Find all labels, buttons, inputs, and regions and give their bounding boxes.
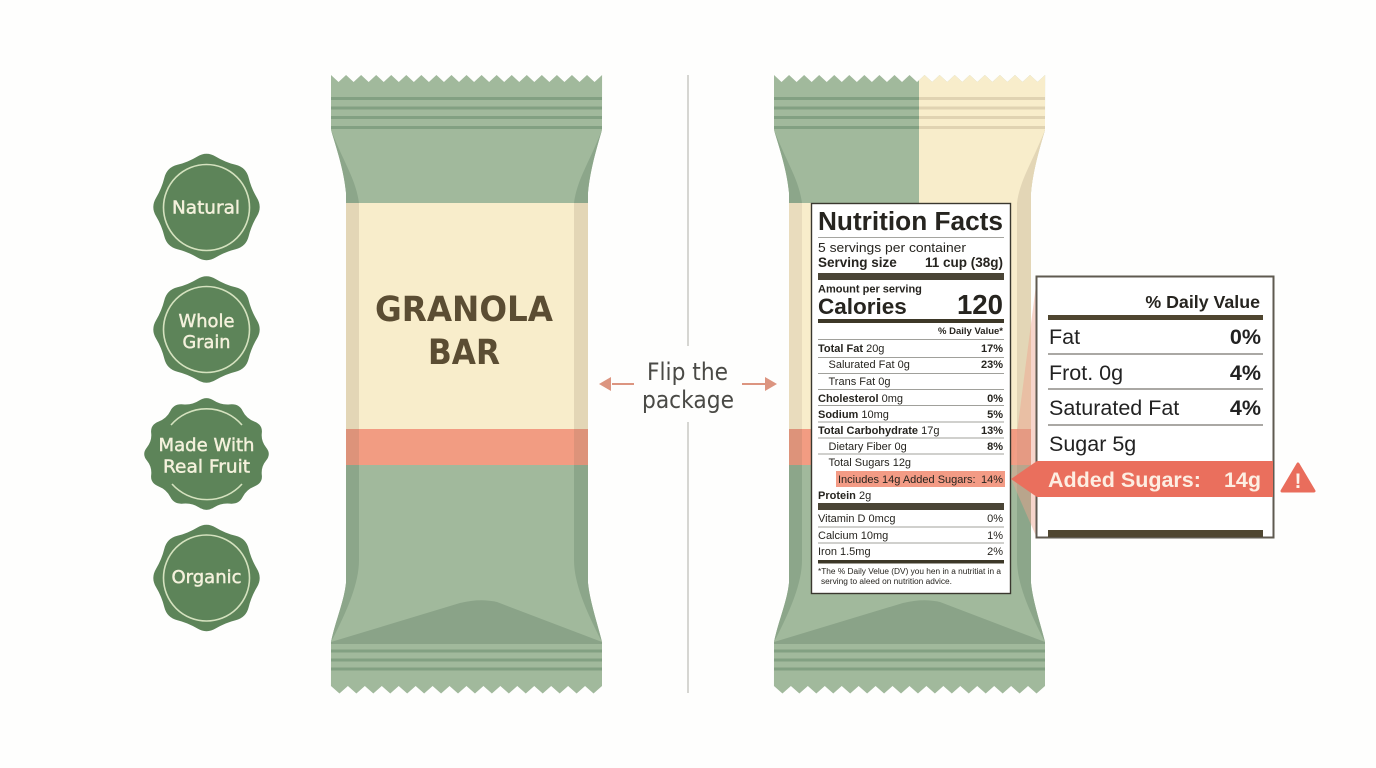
package name: GRANOLA BAR: BAR [428,333,500,373]
calories: 120 [957,289,1003,320]
vitamins and minerals: Iron 1.5mg [818,546,871,558]
callout rows: Fat [1049,325,1080,349]
callout rows: Saturated Fat [1049,396,1179,420]
footnote: serving to aleed on nutrition advice. [821,577,952,586]
vitamins and minerals: Calcium 10mg [818,530,888,542]
package: back [774,75,1046,694]
label: Flip the package [642,358,734,414]
callout banner: Added Sugars 14g: Added Sugars: [1048,468,1201,492]
highlighted row: added sugars: Inciudes 14g Added Sugars: [838,474,976,486]
package name: GRANOLA BAR: GRANOLA [375,290,553,330]
highlighted row: added sugars: 14% [981,474,1003,486]
serving info [818,240,1003,270]
callout rows: 0% [1230,325,1261,349]
nutrition facts panel [812,204,1010,594]
label: Flip the package: Flip the [647,358,728,386]
callout rows: 4% [1230,396,1261,420]
daily value header: % Daily Value* [938,326,1003,337]
serving info: 11 cup (38g) [925,255,1003,270]
nutrient rows: Total Fat 20g [818,343,884,355]
nutrient rows: 13% [981,425,1003,437]
serving info: Serving size [818,255,897,270]
nutrient rows: Dietary Fiber 0g [828,441,907,453]
icon: warning triangle: ! [1294,470,1302,493]
calories: Calories [818,294,907,319]
callout rows: Frot. 0g [1049,361,1123,385]
callout rows: 4% [1230,361,1261,385]
panel title: Nutrition Facts [818,206,1003,236]
badge: Made With Real Fruit [144,398,269,510]
badge: Organic: Organic [172,567,242,588]
nutrient rows: Total Sugars 12g [828,457,911,469]
nutrient rows: 8% [987,441,1003,453]
icon: warning triangle [1282,464,1314,493]
callout: zoomed daily value panel [1036,276,1274,538]
callout heading: % Daily Value [1145,292,1260,312]
vitamins and minerals [818,513,1003,558]
nutrient rows: Total Carbohydrate 17g [818,425,939,437]
badge: Natural [153,154,260,260]
center divider [687,75,689,693]
badge: Made With Real Fruit: Made With [158,435,254,456]
arrow: left [599,377,634,391]
label: Flip the package: package [642,386,734,414]
badge: Whole Grain: Whole [178,311,234,332]
package name: GRANOLA BAR [375,290,553,373]
nutrient rows: Salurated Fat 0g [828,359,910,371]
nutrient rows: 23% [981,359,1003,371]
callout banner: Added Sugars 14g: 14g [1224,468,1261,492]
callout rows: Sugar 5g [1049,432,1136,456]
vitamins and minerals: 0% [987,513,1003,525]
protein row: Protein 2g [818,490,871,502]
nutrient rows: 5% [987,409,1003,421]
calories [818,284,1003,320]
callout connector cone [1011,285,1036,536]
footnote: *The % Daily Velue (DV) you hen in a nutritiat in a [818,567,1002,576]
highlighted row: added sugars [836,471,1005,487]
vitamins and minerals: 1% [987,530,1003,542]
badge: Natural: Natural [172,198,240,218]
nutrient rows: Cholesterol 0mg [818,393,903,405]
package: front [331,75,602,694]
arrow: right [742,377,777,391]
nutrient rows: 17% [981,343,1003,355]
badge: Made With Real Fruit: Real Fruit [163,456,250,478]
nutrient rows: 0% [987,393,1003,405]
nutrient rows: Sodium 10mg [818,409,889,421]
calories: Amount per serving [818,284,922,296]
nutrient rows: Trans Fat 0g [828,376,890,388]
vitamins and minerals: 2% [987,546,1003,558]
serving info: 5 servings per container [818,240,967,255]
badge: Whole Grain [153,276,260,383]
nutrient rows [818,343,1003,469]
badge: Whole Grain: Grain [182,332,230,353]
callout banner: Added Sugars 14g [1011,461,1273,497]
footnote [818,567,1002,586]
callout rows [1049,325,1261,456]
vitamins and minerals: Vitamin D 0mcg [818,513,895,525]
badge: Organic [153,525,260,631]
